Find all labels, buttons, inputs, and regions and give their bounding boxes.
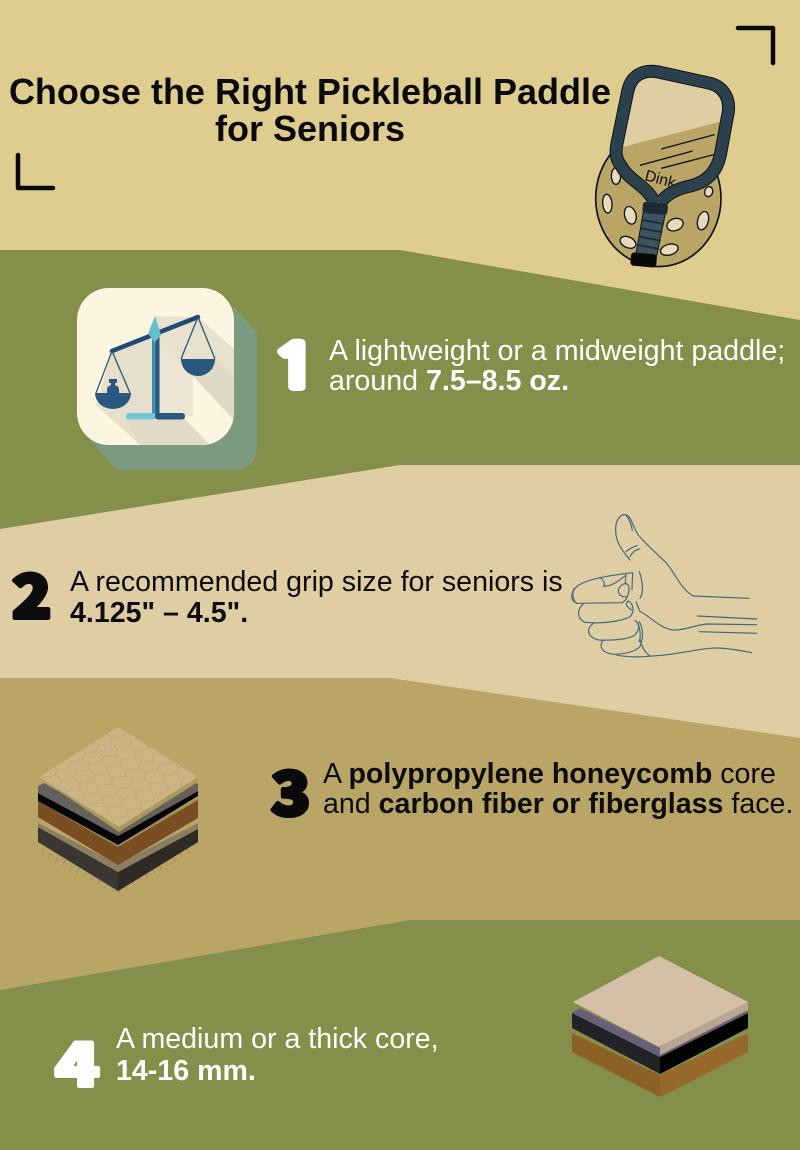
step 1 number: 1 [272, 337, 319, 397]
step 4 text: A medium or a thick core, [116, 1023, 439, 1055]
step 2 text: A recommended grip size for seniors is [70, 566, 563, 598]
title [9, 71, 611, 149]
dark base layer [38, 827, 198, 891]
step 3 number: 3 [271, 746, 310, 832]
panel: step 1 background [0, 250, 800, 540]
beam [112, 317, 198, 351]
icon: balance scale card [77, 288, 257, 470]
icon: paddle layers, honeycomb core [38, 727, 198, 891]
step 4 number: 4 [55, 1017, 100, 1104]
weight [107, 379, 119, 393]
title: Choose the Right Pickleball Paddle [9, 71, 611, 112]
step 2 text: 4.125" – 4.5". [70, 597, 248, 629]
card drop shadow [90, 307, 257, 470]
brown layer [572, 1033, 748, 1097]
card [77, 288, 234, 445]
step 3 text [323, 758, 793, 820]
step 1 text: A lightweight or a midweight paddle; [329, 335, 785, 367]
top plate [660, 1002, 748, 1055]
right pan [181, 359, 215, 376]
paddle face [616, 71, 729, 203]
icon: paddle layers, thick core [572, 956, 748, 1097]
handle collar [642, 202, 668, 215]
panel: step 4 background [0, 920, 800, 1150]
black layer [38, 791, 198, 845]
panel: step 2 background [0, 465, 800, 750]
panel: header background [0, 0, 800, 340]
brown layer [38, 800, 198, 865]
corner bracket: top right [738, 28, 773, 63]
step 3 text: and carbon fiber or fiberglass face. [323, 788, 793, 820]
pickleball [596, 130, 721, 267]
hanging strings [96, 317, 215, 393]
paddle frame [616, 71, 729, 203]
long shadows [96, 316, 234, 445]
icon: pickleball paddle and ball [596, 71, 729, 268]
pole tip [148, 316, 161, 342]
step 4 text: 14-16 mm. [116, 1055, 256, 1087]
title: for Seniors [215, 108, 405, 149]
handle butt cap [630, 252, 657, 268]
step 1 text: around 7.5–8.5 oz. [329, 365, 569, 397]
paddle lower face [617, 121, 723, 203]
base [126, 413, 156, 420]
step 2 text [70, 566, 563, 629]
corner bracket: bottom left [18, 155, 53, 188]
paddle frame outline [616, 71, 729, 203]
gray layer [38, 781, 198, 836]
step 4 text [116, 1023, 439, 1087]
paddle text lines [640, 135, 715, 168]
step 3 text: A polypropylene honeycomb core [323, 758, 776, 790]
ground texture [42, 850, 190, 891]
paddle handle [636, 212, 665, 256]
icon: thumbs up hand [572, 515, 757, 657]
step 2 number: 2 [12, 549, 51, 635]
paddle label: Dink [643, 167, 678, 192]
step 1 text [329, 335, 785, 397]
pole [155, 335, 160, 415]
top honeycomb plate [39, 777, 198, 832]
mauve layer [572, 1008, 748, 1057]
black layer [572, 1013, 748, 1074]
panel: step 3 background [0, 678, 800, 1000]
left pan [95, 393, 131, 409]
